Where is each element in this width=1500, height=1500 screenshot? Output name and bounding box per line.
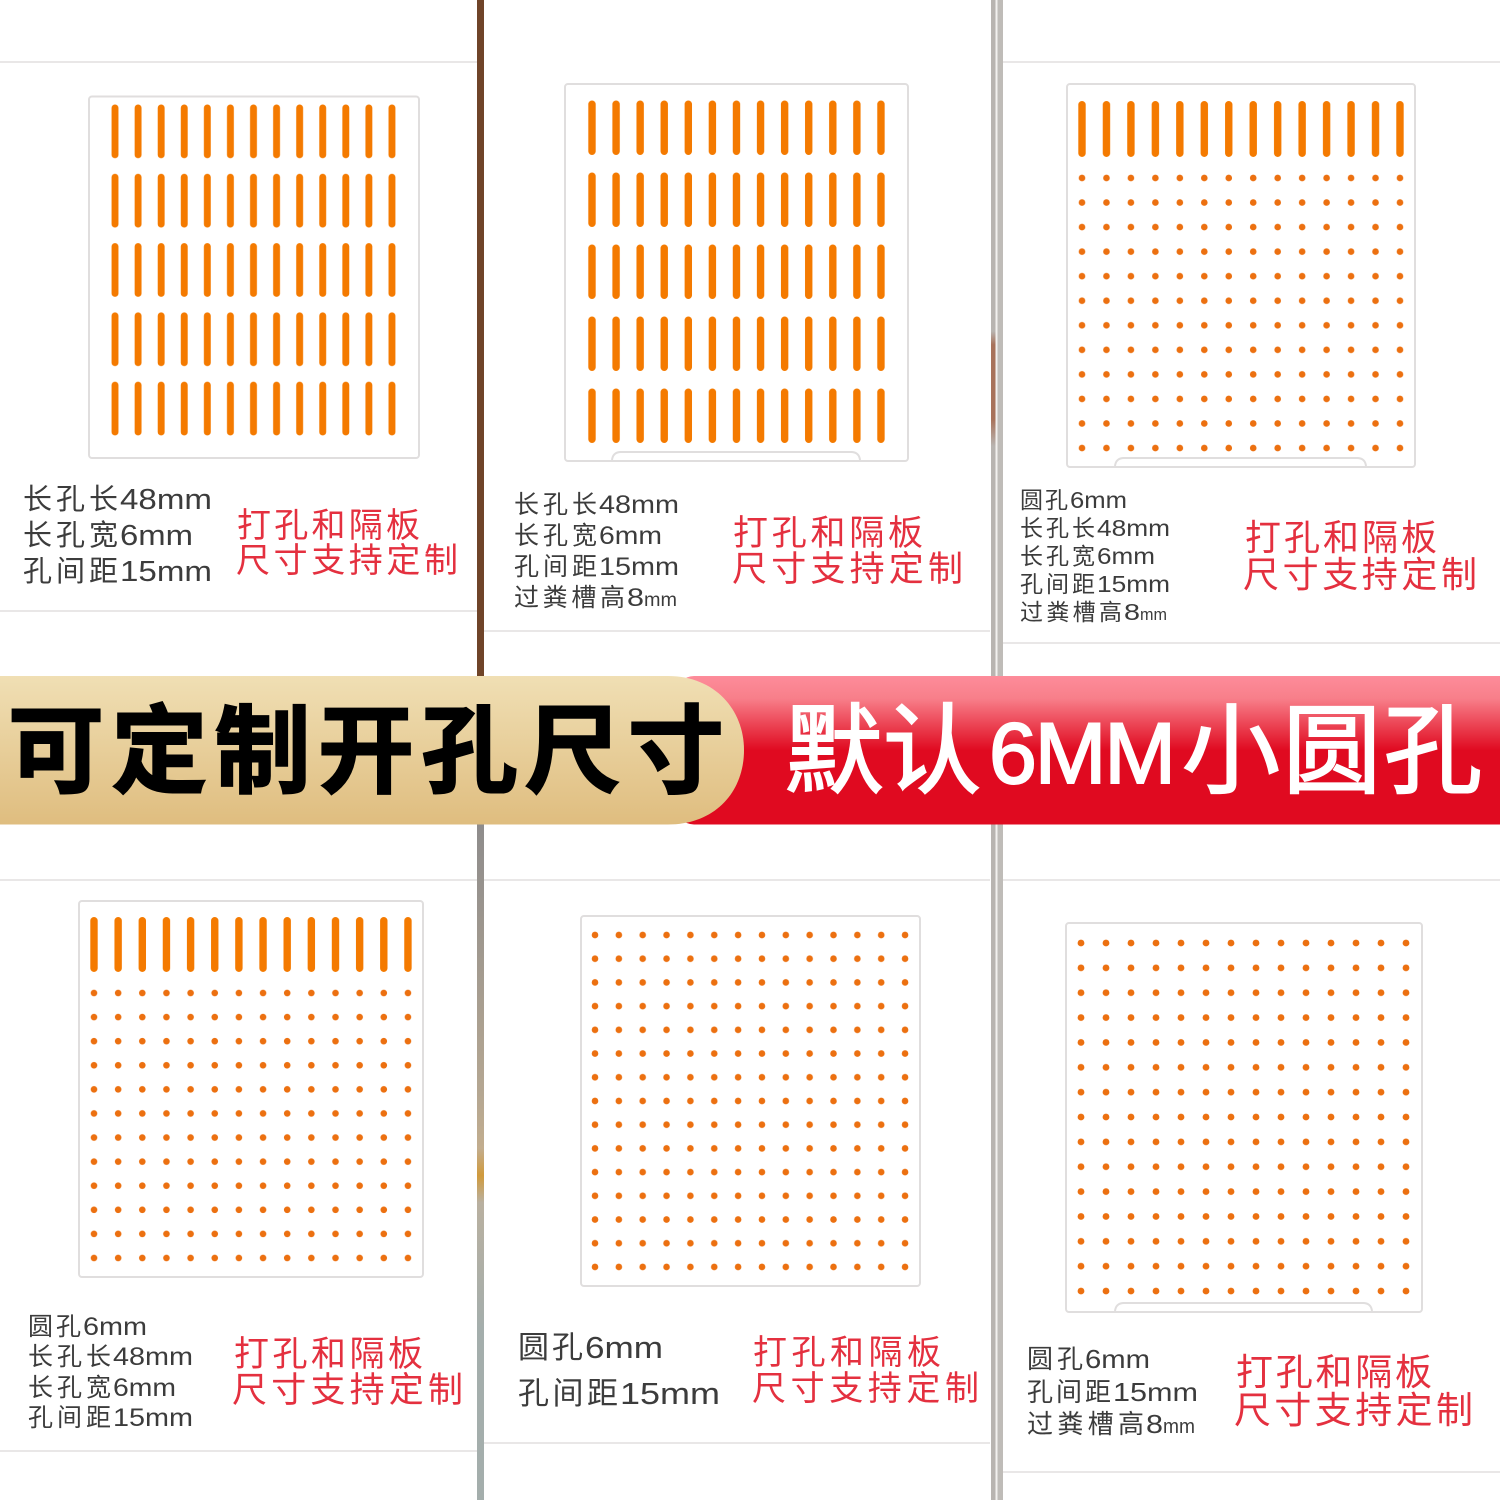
red customization note: 打孔和隔板 xyxy=(733,514,923,553)
panel: one slot row, round holes, groove xyxy=(1020,84,1477,625)
red customization note: 尺寸支持定制 xyxy=(232,1371,463,1410)
red banner text: 小圆孔 xyxy=(1182,696,1482,806)
spec text: 长孔长 xyxy=(1020,515,1095,541)
board outline xyxy=(581,916,920,1286)
spec text: 孔间距 xyxy=(1020,571,1095,597)
round hole grid xyxy=(583,923,917,1279)
panel: long slots, 5 rows xyxy=(23,96,458,588)
red customization note xyxy=(232,1335,463,1410)
red customization note: 尺寸支持定制 xyxy=(1234,1390,1473,1431)
round hole grid xyxy=(1068,931,1418,1303)
panel: round holes with groove xyxy=(1027,923,1473,1439)
board outline xyxy=(565,84,908,461)
red customization note xyxy=(752,1334,979,1408)
spec text: 长孔宽 xyxy=(28,1374,111,1402)
panel: long slots with drain groove xyxy=(514,84,963,612)
gold banner text: 可定制开孔尺寸 xyxy=(8,699,724,806)
spec text: 孔间距 xyxy=(23,555,118,588)
panel: round holes only xyxy=(518,916,979,1411)
round hole grid xyxy=(1070,166,1412,460)
spec text: 6mm xyxy=(1097,543,1155,569)
drain groove notch xyxy=(612,452,860,460)
board outline xyxy=(89,96,419,458)
red customization note: 尺寸支持定制 xyxy=(236,542,458,580)
red customization note: 打孔和隔板 xyxy=(1236,1352,1432,1393)
spec text: 6mm xyxy=(120,520,193,552)
drain groove notch xyxy=(1115,1303,1372,1311)
spec text: 48mm xyxy=(113,1343,193,1371)
red customization note: 尺寸支持定制 xyxy=(1243,554,1477,595)
red customization note: 打孔和隔板 xyxy=(753,1334,941,1372)
spec text: 8 xyxy=(1124,599,1140,625)
spec text: 6mm xyxy=(1070,487,1127,513)
panel: slot row with round holes xyxy=(28,901,463,1432)
red customization note: 尺寸支持定制 xyxy=(732,550,963,589)
spec text: 圆孔 xyxy=(518,1330,583,1365)
spec text: mm xyxy=(644,590,677,611)
red customization note xyxy=(1243,517,1477,595)
drain groove notch xyxy=(1115,458,1366,466)
spec text: 过粪槽高 xyxy=(514,584,625,612)
spec text: 6mm xyxy=(83,1313,147,1341)
spec text: 48mm xyxy=(120,484,212,516)
spec text: 8 xyxy=(627,584,644,612)
spec text xyxy=(23,483,212,588)
spec text: mm xyxy=(1163,1416,1195,1438)
red banner text xyxy=(785,696,1482,806)
spec text: 6mm xyxy=(599,522,662,550)
spec text: 15mm xyxy=(113,1404,193,1432)
spec text: 过粪槽高 xyxy=(1027,1409,1144,1439)
spec text xyxy=(518,1330,720,1411)
red customization note xyxy=(1234,1352,1473,1431)
spec text: 长孔宽 xyxy=(23,519,118,552)
spec text: 孔间距 xyxy=(518,1376,618,1411)
red banner segment xyxy=(676,676,1500,824)
spec text: 过粪槽高 xyxy=(1020,599,1122,625)
spec text: 15mm xyxy=(620,1376,720,1411)
spec text: 15mm xyxy=(1113,1377,1198,1407)
spec text: 长孔长 xyxy=(514,491,597,519)
banner xyxy=(0,676,1500,824)
spec text: 15mm xyxy=(1097,571,1170,597)
board outline xyxy=(79,901,423,1277)
spec text xyxy=(1020,487,1170,625)
spec text: 48mm xyxy=(599,491,679,519)
spec text: mm xyxy=(1140,605,1167,624)
spec text: 15mm xyxy=(120,556,212,588)
slot grid xyxy=(103,104,403,451)
slot row xyxy=(1070,101,1412,157)
board outline xyxy=(1067,84,1415,467)
spec text: 长孔长 xyxy=(28,1343,111,1371)
spec text xyxy=(1027,1344,1198,1439)
red banner text: 默认 xyxy=(785,696,981,806)
spec text xyxy=(514,491,679,612)
spec text: 孔间距 xyxy=(1027,1377,1111,1407)
spec text: 15mm xyxy=(599,553,679,581)
spec text: 孔间距 xyxy=(28,1404,111,1432)
round hole grid xyxy=(82,981,420,1270)
board outline xyxy=(1066,923,1422,1312)
spec text: 48mm xyxy=(1097,515,1170,541)
red customization note: 打孔和隔板 xyxy=(237,507,420,545)
spec text: 长孔长 xyxy=(23,483,118,516)
red customization note xyxy=(236,507,458,580)
slot row xyxy=(82,917,420,972)
spec text: 8 xyxy=(1146,1409,1163,1439)
spec text: 圆孔 xyxy=(28,1313,81,1341)
spec text: 孔间距 xyxy=(514,553,597,581)
spec text: 圆孔 xyxy=(1027,1344,1083,1374)
red banner text: 6MM xyxy=(989,706,1176,802)
slot grid xyxy=(580,100,893,460)
spec text: 长孔宽 xyxy=(514,522,597,550)
red customization note xyxy=(732,514,963,589)
gold banner segment xyxy=(0,676,744,824)
red customization note: 打孔和隔板 xyxy=(234,1335,423,1374)
spec text: 6mm xyxy=(1085,1344,1150,1374)
spec text: 6mm xyxy=(113,1374,176,1402)
red customization note: 打孔和隔板 xyxy=(1245,517,1437,558)
spec text: 圆孔 xyxy=(1020,487,1068,513)
spec text: 长孔宽 xyxy=(1020,543,1095,569)
spec text xyxy=(28,1313,193,1432)
spec text: 6mm xyxy=(585,1330,663,1365)
red customization note: 尺寸支持定制 xyxy=(752,1370,979,1408)
